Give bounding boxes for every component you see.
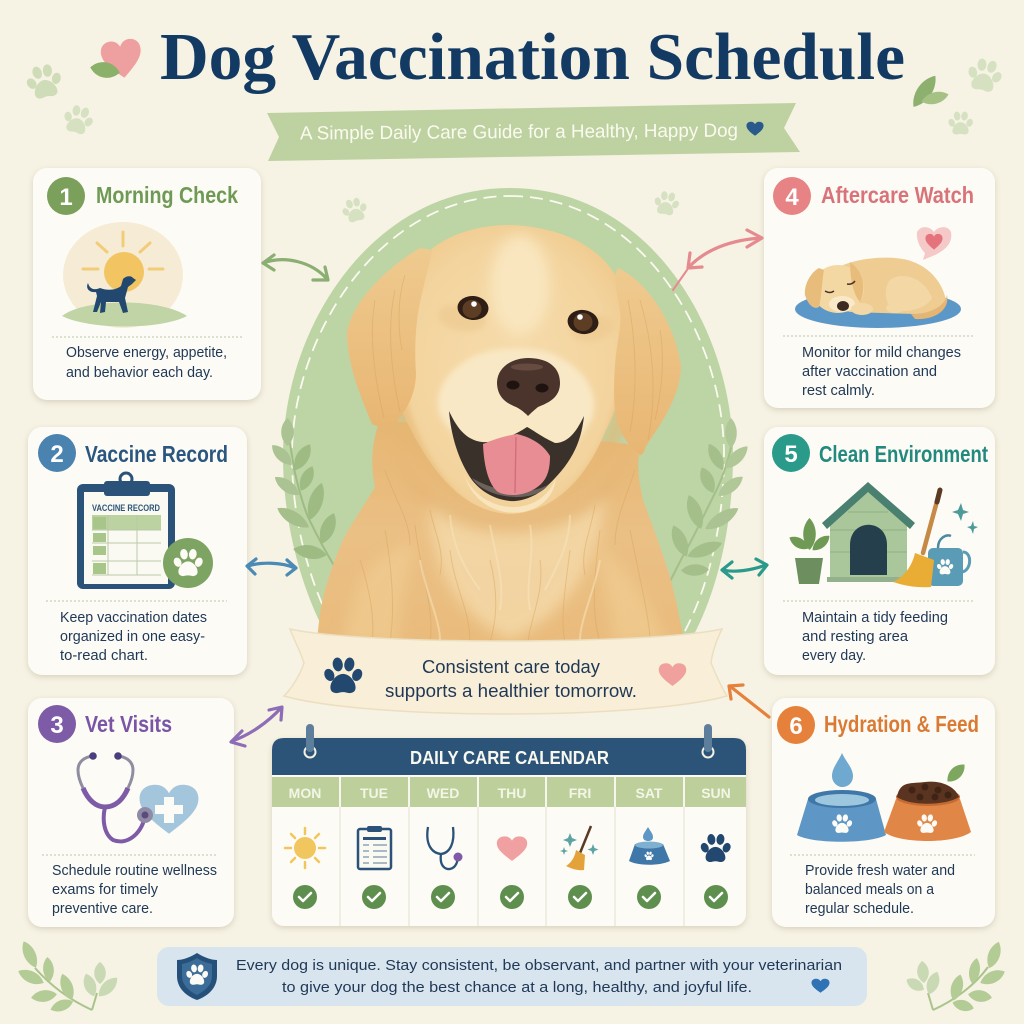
weekday row: SAT bbox=[636, 785, 663, 801]
icon: banner paw bbox=[322, 657, 364, 693]
step number 5: 5 bbox=[784, 441, 798, 468]
body text: balanced meals on a bbox=[805, 882, 935, 898]
icon: subtitle heart bbox=[746, 122, 764, 136]
footer text: to give your dog the best chance at a long, healthy, and joyful life. bbox=[282, 980, 752, 996]
body text bbox=[802, 610, 948, 664]
icon: banner heart bbox=[659, 663, 686, 686]
divider bbox=[783, 335, 975, 337]
icon: water and food bowls bbox=[797, 753, 971, 842]
subtitle text: A Simple Daily Care Guide for a Healthy, Happy Dog bbox=[300, 120, 738, 145]
body text: Observe energy, appetite, bbox=[66, 345, 227, 361]
body text: Keep vaccination dates bbox=[60, 610, 207, 626]
laurel branch: right bbox=[667, 418, 752, 587]
panel: 6 Hydration and Feed bbox=[772, 698, 995, 927]
heading: Clean Environment bbox=[819, 441, 988, 467]
banner: consistent care bbox=[284, 629, 727, 714]
body text: exams for timely bbox=[52, 882, 159, 898]
icon: calendar bowl bbox=[629, 827, 670, 865]
chest highlight bbox=[430, 495, 605, 640]
body text: to-read chart. bbox=[60, 648, 148, 664]
body text: Monitor for mild changes bbox=[802, 345, 961, 361]
weekday row: THU bbox=[498, 785, 526, 801]
step number 1 bbox=[47, 177, 85, 215]
panel: 1 Morning Check bbox=[33, 168, 261, 400]
icon: calendar sun bbox=[285, 828, 325, 868]
dog head bbox=[389, 225, 629, 514]
icon: sleeping puppy on cushion bbox=[795, 227, 961, 328]
body text: every day. bbox=[802, 648, 866, 664]
step number 2 bbox=[38, 434, 76, 472]
subtitle ribbon bbox=[267, 103, 800, 161]
arrow: card 5 to dog bbox=[722, 559, 767, 578]
fur strokes bbox=[360, 275, 662, 642]
arrow: card 2 to dog bbox=[247, 559, 296, 575]
weekday row: WED bbox=[427, 785, 459, 801]
central oval with dog bbox=[268, 188, 752, 648]
calendar check marks bbox=[293, 885, 728, 909]
panel: 5 Clean Environment bbox=[764, 427, 995, 675]
brow shading bbox=[436, 301, 488, 335]
body text: and behavior each day. bbox=[66, 365, 213, 381]
arrow: card 4 to dog bbox=[673, 230, 762, 290]
weekday row: MON bbox=[289, 785, 321, 801]
step number 6 bbox=[777, 706, 815, 744]
dog eyes bbox=[457, 295, 600, 336]
heading: Morning Check bbox=[96, 182, 238, 208]
heading: Hydration & Feed bbox=[824, 711, 979, 737]
icon: shield with paw bbox=[177, 953, 217, 1000]
green oval bbox=[283, 188, 733, 645]
body text bbox=[52, 863, 217, 917]
icon: sunrise and dog bbox=[62, 222, 187, 328]
body text: Maintain a tidy feeding bbox=[802, 610, 948, 626]
daily care calendar bbox=[272, 724, 746, 926]
weekday row: FRI bbox=[569, 785, 591, 801]
body text bbox=[805, 863, 955, 917]
body text bbox=[802, 345, 961, 399]
step number 4 bbox=[773, 177, 811, 215]
title text: Dog Vaccination Schedule bbox=[160, 20, 905, 94]
icon: clipboard with paw: VACCINE RECORD bbox=[92, 503, 160, 513]
body text: and resting area bbox=[802, 629, 909, 645]
divider bbox=[46, 600, 227, 602]
footer note bbox=[157, 947, 867, 1006]
heading: Vaccine Record bbox=[85, 441, 228, 467]
corner leaves: bottom left bbox=[16, 939, 121, 1015]
panel: 2 Vaccine Record bbox=[28, 427, 247, 675]
connector arrows bbox=[231, 230, 769, 746]
body text: preventive care. bbox=[52, 901, 153, 917]
divider bbox=[42, 854, 216, 856]
dog mouth bbox=[449, 411, 584, 501]
heading: Aftercare Watch bbox=[821, 182, 974, 208]
banner text: Consistent care today bbox=[422, 656, 601, 677]
step number 4: 4 bbox=[785, 184, 799, 211]
icon: clipboard with paw bbox=[77, 473, 213, 589]
divider bbox=[790, 854, 975, 856]
icon: stethoscope and heart bbox=[78, 752, 198, 841]
icon: doghouse, plant, broom and cup bbox=[787, 482, 978, 587]
body text: after vaccination and bbox=[802, 364, 937, 380]
cheek fur bbox=[388, 380, 470, 505]
corner leaves: bottom right bbox=[904, 940, 1007, 1013]
body text: Schedule routine wellness bbox=[52, 863, 217, 879]
icon: footer heart bbox=[811, 979, 830, 993]
neck shadow bbox=[395, 445, 625, 535]
decorative paw prints bbox=[22, 55, 1006, 224]
icon: title heart bbox=[89, 38, 144, 80]
icon: calendar broom bbox=[560, 826, 598, 870]
dog left ear bbox=[347, 248, 432, 427]
weekday row: TUE bbox=[360, 785, 388, 801]
body text: regular schedule. bbox=[805, 901, 914, 917]
divider bbox=[783, 600, 975, 602]
step number 6: 6 bbox=[789, 713, 803, 740]
dog body and mane bbox=[316, 420, 686, 648]
body text: organized in one easy- bbox=[60, 629, 205, 645]
weekday row bbox=[272, 777, 746, 926]
heading: Vet Visits bbox=[85, 711, 172, 737]
icon: calendar heart bbox=[497, 836, 527, 861]
calendar rings bbox=[304, 724, 714, 758]
body text bbox=[60, 610, 207, 664]
panel: 4 Aftercare Watch bbox=[764, 168, 995, 408]
step number 3: 3 bbox=[50, 712, 64, 739]
calendar title: DAILY CARE CALENDAR bbox=[410, 748, 609, 768]
body text bbox=[66, 345, 227, 381]
icon: calendar stethoscope bbox=[427, 827, 462, 869]
divider bbox=[52, 336, 243, 338]
title bbox=[89, 20, 950, 111]
panel: 3 Vet Visits bbox=[28, 698, 234, 927]
dog nose bbox=[497, 358, 560, 416]
laurel branch: left bbox=[268, 418, 340, 572]
weekday row: SUN bbox=[701, 785, 731, 801]
step number 3 bbox=[38, 705, 76, 743]
dog muzzle bbox=[438, 349, 594, 447]
banner text bbox=[385, 656, 637, 701]
body text: rest calmly. bbox=[802, 383, 875, 399]
arrow: card 1 to dog bbox=[263, 255, 328, 280]
step number 1: 1 bbox=[59, 184, 73, 211]
step number 2: 2 bbox=[50, 441, 64, 468]
illustration: golden retriever bbox=[316, 225, 686, 648]
dashed stitching bbox=[292, 196, 724, 640]
dog chin bbox=[464, 474, 556, 513]
footer text bbox=[236, 958, 842, 996]
footer text: Every dog is unique. Stay consistent, be observant, and partner with your veterinarian bbox=[236, 958, 842, 974]
step number 5 bbox=[772, 434, 810, 472]
banner text: supports a healthier tomorrow. bbox=[385, 680, 637, 701]
arrow: card 6 to banner bbox=[729, 685, 769, 717]
icon: calendar paw bbox=[699, 833, 732, 862]
body text: Provide fresh water and bbox=[805, 863, 955, 879]
icon: calendar clipboard bbox=[358, 826, 391, 869]
dog tongue bbox=[483, 434, 550, 495]
icon: title leaves bbox=[908, 72, 950, 111]
dog right ear bbox=[614, 268, 681, 455]
forehead highlight bbox=[490, 235, 550, 335]
arrow: card 3 to banner bbox=[231, 707, 282, 746]
calendar header bbox=[272, 738, 746, 775]
